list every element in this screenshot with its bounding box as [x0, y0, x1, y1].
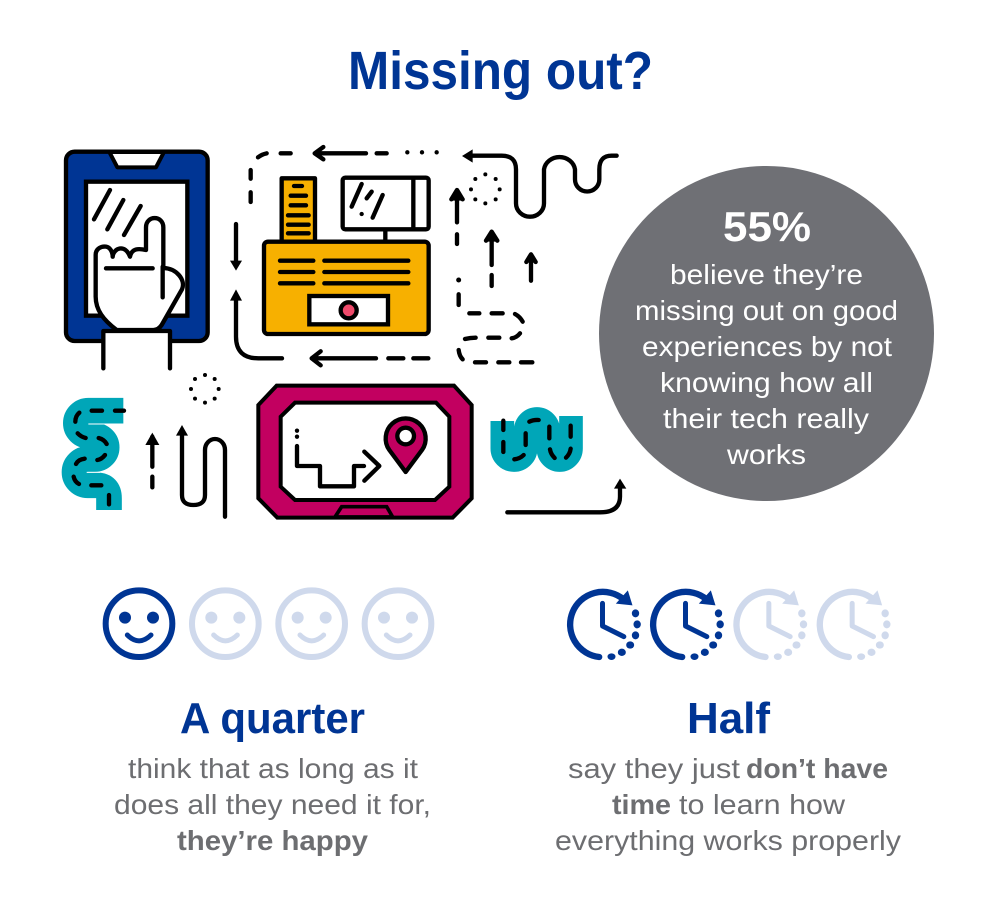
callout text: experiences by not — [642, 331, 892, 362]
text block: half description — [555, 753, 901, 856]
callout text: missing out on good — [635, 295, 898, 326]
text block: half description: time — [612, 789, 671, 820]
title: Missing out? — [348, 41, 653, 101]
text block: half description: don’t have — [746, 753, 888, 784]
text block: a quarter description: they’re happy — [177, 825, 368, 856]
text block: half description: say they just — [568, 753, 740, 784]
illustration: yellow terminal with looping path — [230, 147, 617, 365]
heading: A quarter: A quarter — [180, 694, 365, 743]
text block: a quarter description: does all they need it for, — [114, 789, 431, 820]
icon: hand — [96, 218, 183, 368]
text block: a quarter description: think that as long as it — [128, 753, 418, 784]
callout text: their tech really — [663, 403, 869, 434]
panel: 55% callout circle — [599, 166, 934, 501]
callout text: knowing how all — [660, 367, 873, 398]
text block: a quarter description — [114, 753, 431, 856]
heading: Half: Half — [687, 694, 770, 743]
icons: four clocks, two highlighted — [570, 590, 890, 660]
text block: half description: to learn how — [679, 789, 846, 820]
text block: half description: everything works properly — [555, 825, 901, 856]
callout text — [635, 259, 898, 470]
callout number: 55% — [723, 203, 811, 250]
callout text: works — [726, 439, 806, 470]
illustration: teal winding road and arrows — [74, 373, 225, 517]
callout text: believe they’re — [670, 259, 863, 290]
illustration: tablet with pointing hand — [66, 152, 208, 368]
illustration: magenta sat-nav with map pin — [258, 386, 626, 518]
icons: four smiley faces, one highlighted — [106, 590, 431, 657]
